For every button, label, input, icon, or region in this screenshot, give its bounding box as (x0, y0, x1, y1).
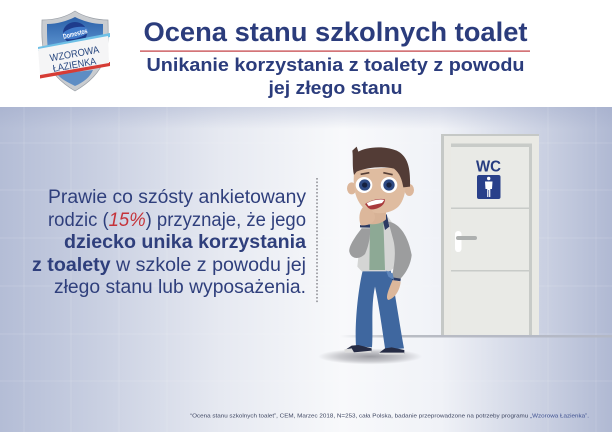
logo: Domestos badge: Domestos (62, 28, 88, 41)
title rule (140, 50, 530, 52)
hand at hip (387, 280, 401, 300)
WC sign (476, 158, 501, 199)
main statement text: Prawie co szósty ankietowany (48, 187, 307, 208)
right sleeve (388, 222, 412, 281)
collar (383, 214, 389, 230)
neck (370, 205, 386, 224)
subtitle: Unikanie korzystania z toalety z powodu (146, 55, 524, 75)
subtitle: jej złego stanu (267, 78, 402, 98)
character: boy (344, 147, 414, 355)
eyes (356, 177, 397, 193)
ears (347, 182, 356, 194)
background panel (0, 107, 612, 432)
header background (0, 0, 612, 107)
legs (356, 271, 404, 350)
door (441, 134, 539, 335)
main statement text: dziecko unika korzystania (64, 232, 306, 253)
title: Ocena stanu szkolnych toalet (144, 17, 528, 47)
left sleeve (349, 228, 370, 258)
door handle (455, 231, 477, 252)
hair (352, 147, 410, 187)
source footnote: “Ocena stanu szkolnych toalet”, CEM, Marzec 2018, N=253, cała Polska, badanie przeprowadzone na potrzeby programu „Wzorowa Łazienka”. (190, 414, 589, 420)
logo: Wzorowa Łazienka shield (38, 11, 110, 91)
t-shirt (369, 219, 385, 270)
cuff (360, 224, 370, 228)
vest (357, 217, 397, 271)
main statement text (32, 187, 307, 298)
logo: label text: WZOROWA (49, 45, 100, 64)
face (354, 167, 406, 213)
dotted divider (316, 178, 318, 303)
WC sign: WC (476, 158, 501, 176)
pocket (386, 271, 394, 280)
person shadow (318, 348, 422, 364)
logo: label text (49, 45, 100, 75)
shoes (345, 345, 372, 352)
main statement text: złego stanu lub wyposażenia. (54, 277, 306, 298)
main statement text: z toalety w szkole z powodu jej (32, 255, 306, 276)
subtitle (146, 55, 524, 98)
main statement text: rodzic (15%) przyznaje, że jego (48, 210, 306, 231)
raised hand (359, 207, 375, 225)
logo: label text: ŁAZIENKA (52, 56, 97, 75)
mouth (365, 199, 385, 209)
eyebrows (361, 173, 393, 175)
floor line (340, 335, 612, 338)
